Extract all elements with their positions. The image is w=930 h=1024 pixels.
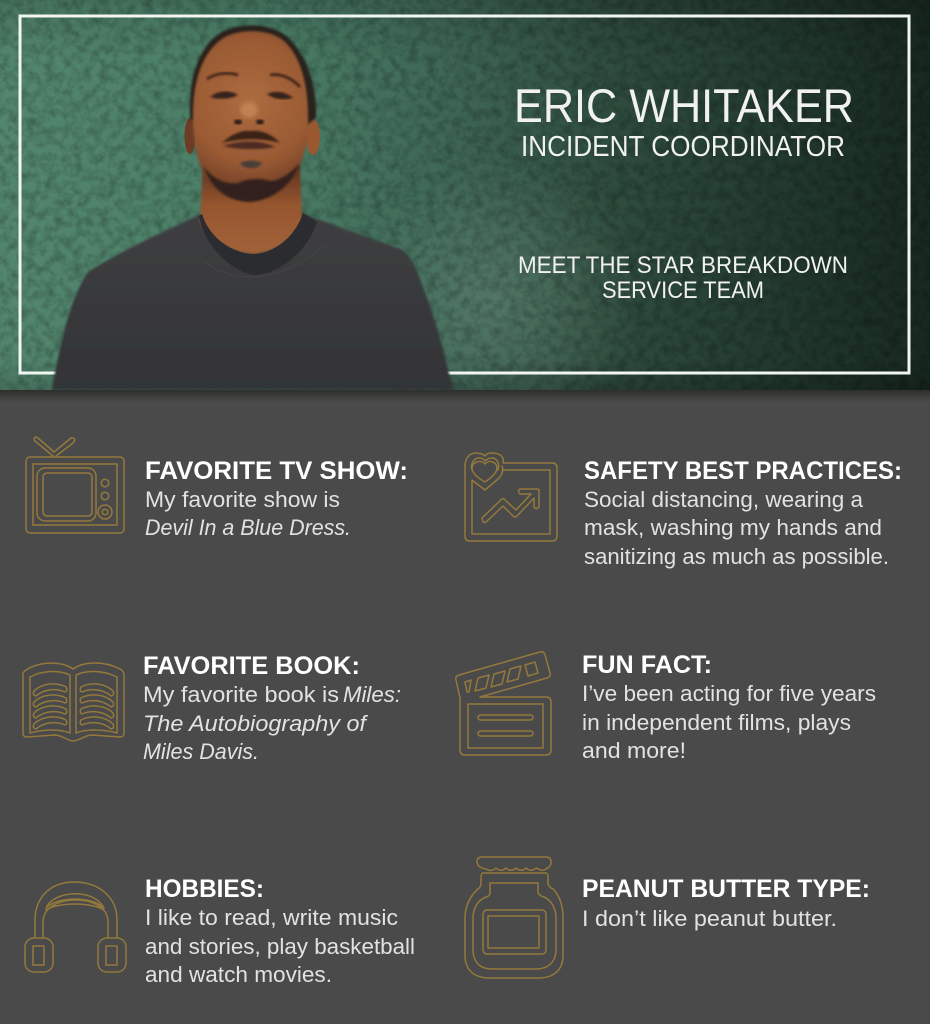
lower panel top shadow (0, 390, 930, 402)
neck (200, 165, 302, 254)
text block: I don’t like peanut butter. (582, 906, 837, 931)
beard (203, 163, 300, 202)
page background (0, 390, 930, 1024)
heading: FAVORITE TV SHOW: (145, 457, 408, 485)
team label: SERVICE TEAM (602, 277, 764, 304)
portrait of Eric Whitaker (52, 25, 453, 390)
icon: open book (23, 663, 124, 741)
panel: favorite book (23, 652, 401, 764)
text block (143, 682, 401, 764)
team label (518, 252, 848, 304)
job title: INCIDENT COORDINATOR (521, 131, 845, 163)
heading: SAFETY BEST PRACTICES: (584, 457, 902, 485)
text block: I’ve been acting for five years (582, 681, 876, 706)
white frame (20, 16, 909, 373)
shirt collar seam (205, 244, 325, 277)
panel: fun fact (456, 651, 876, 763)
face (193, 31, 308, 201)
panel: peanut butter type (465, 857, 870, 978)
text block: The Autobiography of (143, 711, 369, 736)
text block (145, 487, 351, 540)
name heading: ERIC WHITAKER (514, 79, 854, 132)
hair (190, 25, 316, 130)
text block: Social distancing, wearing a (584, 487, 864, 512)
heading: HOBBIES: (145, 875, 264, 903)
text block (582, 681, 876, 763)
text block: in independent films, plays (582, 710, 851, 735)
collar (199, 213, 317, 275)
shirt (52, 212, 453, 390)
text block: mask, washing my hands and (584, 515, 882, 540)
icon: film clapperboard (456, 652, 551, 755)
text block: My favorite book is (143, 682, 339, 707)
moustache and mouth (222, 131, 280, 168)
team label: MEET THE STAR BREAKDOWN (518, 252, 848, 279)
text block: and stories, play basketball (145, 934, 415, 959)
text block: My favorite show is (145, 487, 340, 512)
text block: and watch movies. (145, 962, 332, 987)
heading: PEANUT BUTTER TYPE: (582, 875, 870, 903)
text block: Miles Davis. (143, 739, 259, 764)
text block: sanitizing as much as possible. (584, 544, 889, 569)
text block: Devil In a Blue Dress. (145, 515, 351, 540)
text block (584, 487, 889, 569)
icon: television (26, 437, 124, 533)
text block: and more! (582, 738, 686, 763)
nose (234, 102, 264, 124)
panel: hobbies (25, 875, 415, 987)
text block: Miles: (343, 682, 401, 707)
icon: chart with heart (465, 453, 557, 541)
icon: peanut butter jar (465, 857, 563, 978)
heading: FAVORITE BOOK: (143, 652, 360, 680)
ears (184, 118, 196, 154)
panel: safety best practices (465, 453, 902, 569)
panel: favorite tv show (26, 437, 408, 540)
heading: FUN FACT: (582, 651, 712, 679)
eyebrows (207, 73, 300, 87)
icon: headphones (25, 882, 126, 972)
text block (145, 905, 415, 987)
eyes (210, 91, 293, 99)
text block: I like to read, write music (145, 905, 398, 930)
hero banner (0, 0, 930, 390)
